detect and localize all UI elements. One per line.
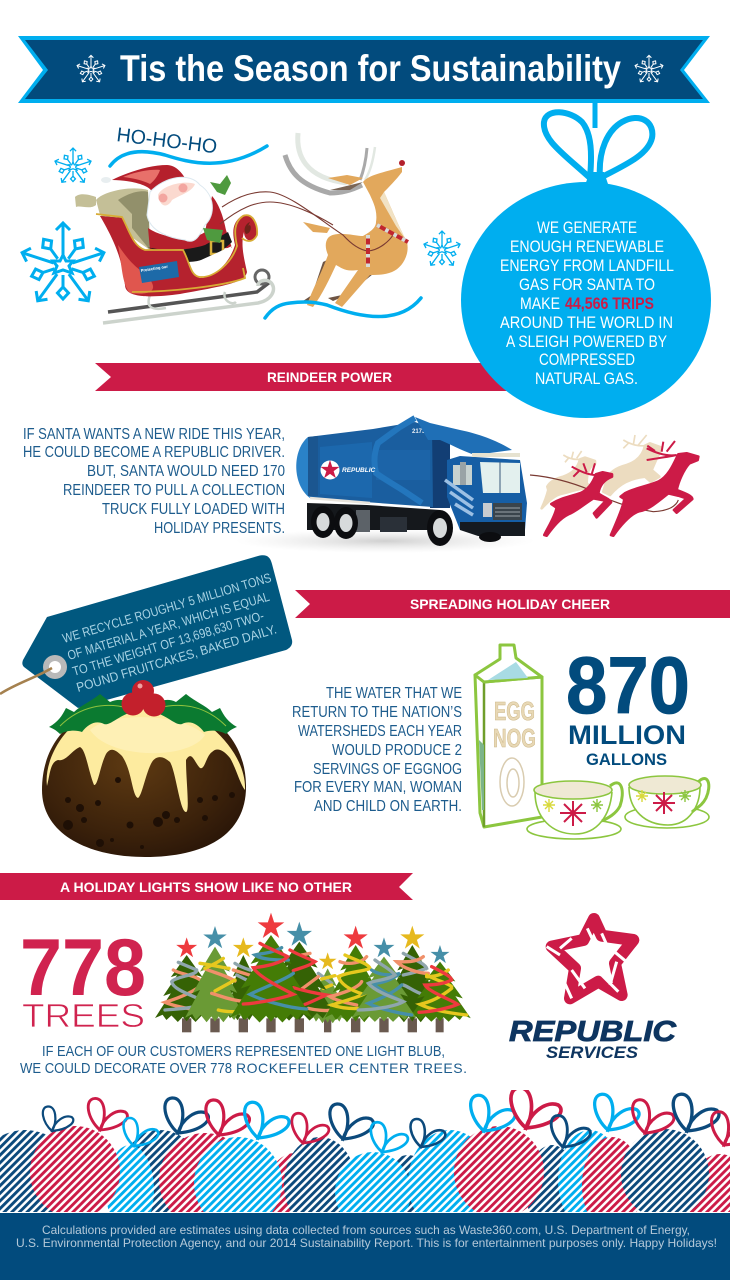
footer: U.S. Environmental Protection Agency, and our 2014 Sustainability Report. This is for entertainment purposes only. Happy Holidays! bbox=[16, 1236, 717, 1250]
mittens bbox=[210, 175, 231, 195]
reindeer body bbox=[307, 167, 408, 307]
fruit specks bbox=[63, 777, 235, 849]
cup left bbox=[527, 781, 622, 839]
cab bbox=[447, 456, 527, 530]
collection truck: REPUBLIC bbox=[342, 467, 376, 474]
icon: snowflake right bbox=[634, 55, 665, 87]
tree 9 bbox=[382, 945, 442, 1022]
tree 5 bbox=[263, 942, 336, 1021]
ornament callout: A SLEIGH POWERED BY bbox=[506, 333, 667, 351]
truck logo bbox=[320, 460, 340, 480]
hat bbox=[112, 165, 186, 192]
icon: snowflake left bbox=[76, 55, 107, 87]
ho-ho-ho label bbox=[110, 124, 267, 166]
tree 10 bbox=[409, 962, 471, 1022]
holly leaves bbox=[49, 694, 132, 734]
santa and sleigh bbox=[75, 165, 273, 323]
icing bbox=[47, 706, 245, 812]
card on sleigh bbox=[139, 261, 179, 283]
ornament callout: 44,566 TRIPS bbox=[565, 295, 654, 313]
tree 3 bbox=[222, 955, 264, 1020]
christmas pudding bbox=[42, 680, 246, 857]
tree 4 bbox=[230, 935, 312, 1023]
tree 7 bbox=[325, 945, 386, 1022]
ornament callout: COMPRESSED bbox=[539, 351, 635, 369]
banner: holiday lights: A HOLIDAY LIGHTS SHOW LIKE NO OTHER bbox=[60, 879, 352, 895]
gift tag: OF MATERIAL A YEAR, WHICH IS EQUAL bbox=[66, 589, 271, 663]
banner: spreading holiday cheer: SPREADING HOLIDAY CHEER bbox=[410, 596, 610, 612]
banner: spreading holiday cheer bbox=[295, 590, 730, 618]
ornament callout bbox=[461, 103, 711, 418]
text block: light bulbs bbox=[20, 1043, 467, 1077]
gift tag bbox=[0, 555, 292, 708]
reindeer bbox=[220, 133, 421, 318]
stat: 870 million gallons bbox=[566, 641, 690, 769]
republic services logo: REPUBLIC bbox=[509, 1016, 677, 1048]
stat: 870 million gallons: MILLION bbox=[568, 720, 686, 750]
eggnog carton: NOG bbox=[493, 723, 536, 753]
stat: 778 trees: TREES bbox=[22, 997, 145, 1034]
text block: light bulbs: WE COULD DECORATE OVER 778 bbox=[20, 1060, 232, 1077]
text block: new ride: REINDEER TO PULL A COLLECTION bbox=[63, 482, 285, 499]
ornament callout: WE GENERATE bbox=[537, 219, 637, 237]
eggnog carton: EGG bbox=[494, 696, 535, 726]
ornament callout: MAKE bbox=[520, 295, 560, 313]
text block: new ride: HOLIDAY PRESENTS. bbox=[154, 520, 285, 537]
eggnog carton bbox=[475, 645, 542, 827]
icon: small snowflake top bbox=[53, 148, 94, 188]
reins bbox=[530, 475, 678, 512]
tree 2 bbox=[185, 947, 245, 1022]
ornament callout: ENOUGH RENEWABLE bbox=[510, 238, 664, 256]
text block: water: WATERSHEDS EACH YEAR bbox=[298, 723, 462, 740]
cab roof bbox=[472, 453, 520, 457]
ornament ribbon bow bbox=[592, 103, 598, 128]
beige reindeer bbox=[542, 435, 662, 508]
santa and sleigh: Protecting our bbox=[140, 264, 169, 273]
berries bbox=[132, 680, 154, 702]
banner: holiday lights bbox=[0, 873, 413, 900]
runners bbox=[108, 282, 270, 312]
lifting arm bbox=[374, 418, 422, 503]
reindeer team bbox=[530, 435, 698, 536]
banner: reindeer power: REINDEER POWER bbox=[267, 369, 392, 385]
pompom bbox=[101, 177, 111, 183]
text block: new ride bbox=[23, 426, 285, 537]
text block: water bbox=[292, 685, 462, 815]
text block: new ride: TRUCK FULLY LOADED WITH bbox=[102, 501, 285, 518]
text block: light bulbs: ROCKEFELLER CENTER TREES. bbox=[236, 1060, 467, 1076]
footer: Calculations provided are estimates using data collected from sources such as Waste360.com, U.S. Department of Energy, bbox=[42, 1223, 690, 1237]
chassis bbox=[307, 503, 447, 530]
face bbox=[158, 183, 195, 205]
gift tag: TO THE WEIGHT OF 13,698,630 TWO- bbox=[71, 608, 266, 679]
ornament ball bbox=[461, 182, 711, 418]
wheels bbox=[311, 506, 453, 546]
striped ornaments row bbox=[0, 1090, 730, 1212]
title: Tis the Season for Sustainability bbox=[120, 48, 621, 89]
ho-ho-ho label: HO-HO-HO bbox=[115, 124, 218, 158]
body bbox=[148, 196, 232, 250]
bells collar bbox=[368, 225, 408, 267]
front ornaments bbox=[30, 1126, 120, 1218]
crimson reindeer bbox=[544, 441, 698, 536]
tree 6 bbox=[309, 968, 346, 1023]
republic services logo bbox=[509, 919, 677, 1062]
ornament callout: GAS FOR SANTA TO bbox=[519, 276, 655, 294]
dark gap bbox=[430, 440, 450, 508]
ornament callout: ENERGY FROM LANDFILL bbox=[500, 257, 674, 275]
reindeer legs bbox=[300, 257, 335, 303]
text block: light bulbs: IF EACH OF OUR CUSTOMERS REPRESENTED ONE LIGHT BLUB, bbox=[42, 1043, 445, 1060]
antlers bbox=[285, 155, 362, 193]
ornament callout: AROUND THE WORLD IN bbox=[500, 314, 673, 332]
gift tag: WE RECYCLE ROUGHLY 5 MILLION TONS bbox=[61, 570, 273, 646]
grille bbox=[493, 503, 522, 520]
sleigh bbox=[100, 215, 257, 296]
tree 1 bbox=[155, 955, 218, 1022]
bows bbox=[43, 1106, 73, 1131]
christmas trees bbox=[155, 913, 471, 1032]
logo star bbox=[547, 919, 633, 998]
nose bbox=[399, 160, 405, 166]
ground swoosh bbox=[265, 298, 421, 318]
sack bbox=[75, 194, 96, 207]
collection truck bbox=[235, 417, 535, 553]
stat: 778 trees: 778 bbox=[20, 923, 146, 1013]
stars bbox=[176, 937, 197, 957]
banner: reindeer power bbox=[95, 363, 520, 391]
truck body bulge bbox=[296, 437, 310, 498]
text block: water: SERVINGS OF EGGNOG bbox=[313, 761, 462, 778]
footer bbox=[0, 1213, 730, 1280]
text block: water: AND CHILD ON EARTH. bbox=[314, 798, 462, 815]
canopy bbox=[415, 417, 512, 455]
cup right bbox=[625, 776, 709, 828]
text block: new ride: BUT, SANTA WOULD NEED 170 bbox=[87, 463, 285, 480]
eggnog cups bbox=[527, 776, 709, 839]
text block: water: WOULD PRODUCE 2 bbox=[332, 742, 462, 759]
title banner bbox=[18, 36, 710, 103]
ornament callout: NATURAL GAS. bbox=[535, 370, 638, 388]
gold trim bbox=[96, 214, 257, 292]
text block: water: FOR EVERY MAN, WOMAN bbox=[294, 779, 462, 796]
truck body bbox=[308, 422, 433, 507]
trunks bbox=[182, 1018, 444, 1032]
gift tag: POUND FRUITCAKES, BAKED DAILY. bbox=[75, 621, 278, 695]
stat: 870 million gallons: GALLONS bbox=[586, 750, 667, 769]
truck number: 2173 bbox=[412, 429, 426, 435]
stripe rail bbox=[310, 498, 370, 503]
tree 8 bbox=[351, 957, 416, 1022]
beard bbox=[147, 177, 212, 241]
icon: small snowflake right bbox=[422, 231, 463, 271]
back ornaments bbox=[0, 1130, 52, 1212]
text block: new ride: HE COULD BECOME A REPUBLIC DRIVER. bbox=[23, 444, 285, 461]
sleigh back bbox=[100, 216, 146, 250]
bumper bbox=[460, 522, 525, 536]
text block: water: THE WATER THAT WE bbox=[326, 685, 462, 702]
text block: new ride: IF SANTA WANTS A NEW RIDE THIS YEAR, bbox=[23, 426, 285, 443]
reins bbox=[222, 192, 393, 251]
belt bbox=[147, 232, 232, 262]
text block: water: RETURN TO THE NATION’S bbox=[292, 704, 462, 721]
icon: large snowflake bbox=[18, 223, 111, 315]
republic services logo: SERVICES bbox=[546, 1043, 639, 1062]
stat: 870 million gallons: 870 bbox=[566, 641, 690, 731]
